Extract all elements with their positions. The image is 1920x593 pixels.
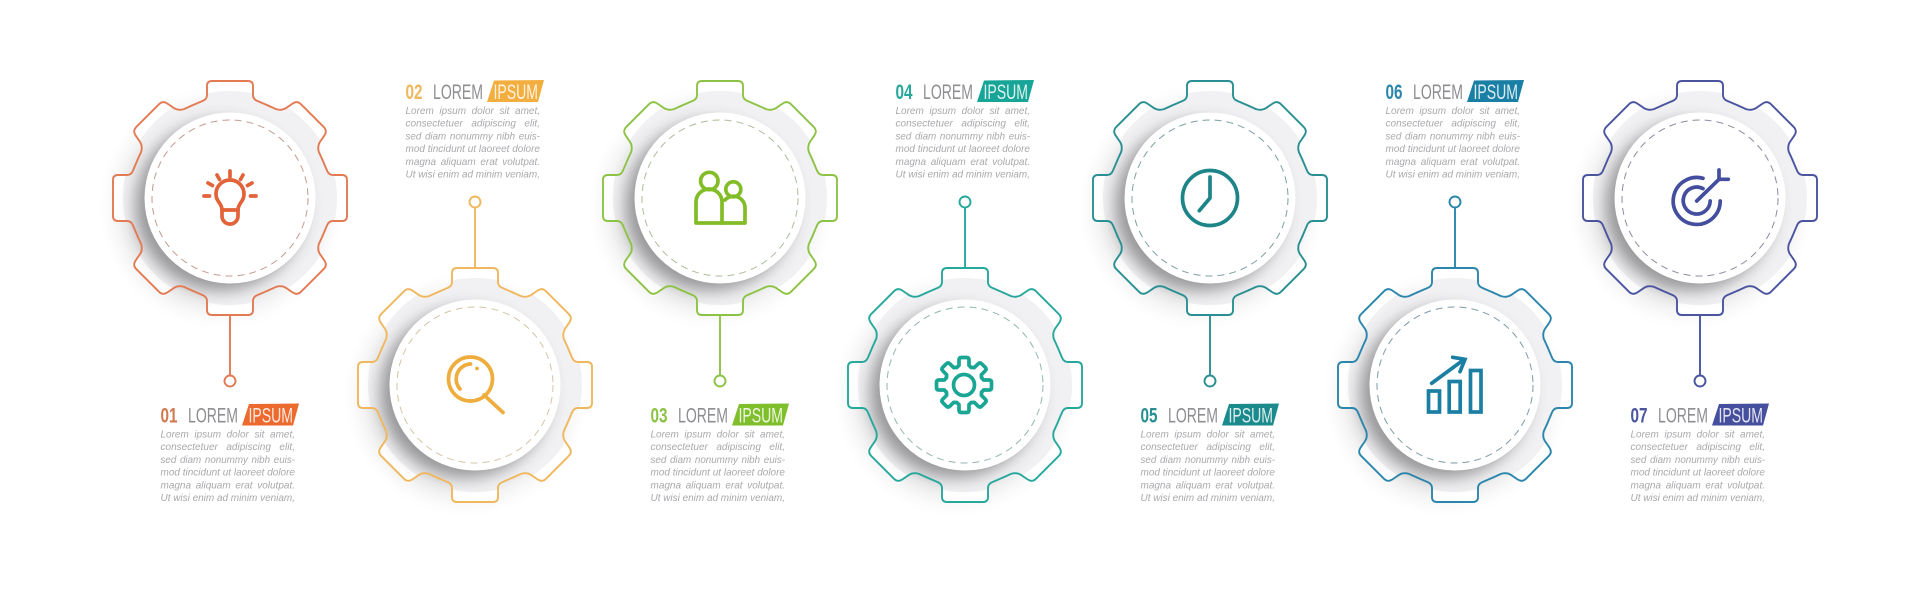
text block 03: Ut wisi enim ad minim veniam, [650,492,785,504]
text block 04: sed diam nonummy nibh euis- [896,130,1030,142]
text block 06 [1386,80,1524,180]
text block 02: IPSUM [494,81,538,104]
text block 07: sed diam nonummy nibh euis- [1630,454,1765,466]
connector: step 6 [1450,196,1460,268]
text block 06: 06 [1386,81,1402,104]
connector: step 4 [960,196,970,268]
text block 01: LOREM [188,404,238,428]
text block 01: consectetuer adipiscing elit, [160,441,295,453]
text block 04 [896,80,1034,180]
text block 06: Ut wisi enim ad minim veniam, [1386,168,1520,180]
connector: step 5 [1204,315,1216,386]
text block 01 [160,404,299,504]
text block 03: 03 [650,404,668,428]
text block 04: consectetuer adipiscing elit, [896,118,1030,130]
text block 04: IPSUM [984,81,1028,104]
step 7 gear [1583,81,1817,386]
text block 05: mod tincidunt ut laoreet dolore [1140,467,1275,479]
text block 03 [650,404,789,504]
text block 04: LOREM [923,81,973,104]
icon: magnifier [448,357,503,412]
step 5 gear [1093,81,1327,386]
icon: clock [1182,170,1238,226]
connector: step 3 [714,315,726,386]
text block 03: mod tincidunt ut laoreet dolore [650,467,785,479]
text block 07: consectetuer adipiscing elit, [1630,441,1765,453]
text block 01: mod tincidunt ut laoreet dolore [160,467,295,479]
step 6 gear [1338,196,1572,502]
text block 01: 01 [160,404,178,428]
text block 05: LOREM [1168,404,1218,428]
icon: bar chart with arrow [1428,357,1481,412]
text block 02: consectetuer adipiscing elit, [406,118,540,130]
text block 05 [1140,404,1279,504]
text block 05: 05 [1140,404,1158,428]
connector: step 7 [1694,315,1706,386]
text block 02: Ut wisi enim ad minim veniam, [406,168,540,180]
text block 02: magna aliquam erat volutpat. [406,156,540,168]
text block 07: 07 [1630,404,1648,428]
text block 05: sed diam nonummy nibh euis- [1140,454,1275,466]
text block 06: sed diam nonummy nibh euis- [1386,130,1520,142]
text block 03: IPSUM [738,404,783,428]
text block 06: LOREM [1413,81,1463,104]
text block 01: Lorem ipsum dolor sit amet, [160,428,295,440]
connector: step 1 [224,315,236,386]
step 1 gear [113,81,347,386]
text block 02: Lorem ipsum dolor sit amet, [406,105,540,117]
text block 06: magna aliquam erat volutpat. [1386,156,1520,168]
text block 04: Lorem ipsum dolor sit amet, [896,105,1030,117]
text block 06: mod tincidunt ut laoreet dolore [1386,143,1520,155]
connector: step 2 [470,196,480,268]
text block 01: magna aliquam erat volutpat. [160,479,295,491]
text block 06: IPSUM [1474,81,1518,104]
text block 01: IPSUM [248,404,293,428]
text block 02: sed diam nonummy nibh euis- [406,130,540,142]
text block 01: Ut wisi enim ad minim veniam, [160,492,295,504]
text block 04: 04 [896,81,913,104]
text block 03: LOREM [678,404,728,428]
text block 05: Ut wisi enim ad minim veniam, [1140,492,1275,504]
text block 04: mod tincidunt ut laoreet dolore [896,143,1030,155]
text block 05: IPSUM [1228,404,1273,428]
text block 04: magna aliquam erat volutpat. [896,156,1030,168]
text block 02 [406,80,544,180]
text block 07: LOREM [1658,404,1708,428]
icon: light bulb [204,171,256,224]
text block 06: consectetuer adipiscing elit, [1386,118,1520,130]
step 4 gear [848,196,1082,502]
text block 07: IPSUM [1718,404,1763,428]
text block 07: Lorem ipsum dolor sit amet, [1630,428,1765,440]
text block 07: Ut wisi enim ad minim veniam, [1630,492,1765,504]
text block 03: sed diam nonummy nibh euis- [650,454,785,466]
text block 05: consectetuer adipiscing elit, [1140,441,1275,453]
text block 02: 02 [406,81,422,104]
text block 03: magna aliquam erat volutpat. [650,479,785,491]
text block 03: consectetuer adipiscing elit, [650,441,785,453]
text block 05: magna aliquam erat volutpat. [1140,479,1275,491]
text block 01: sed diam nonummy nibh euis- [160,454,295,466]
text block 02: mod tincidunt ut laoreet dolore [406,143,540,155]
text block 07 [1630,404,1769,504]
text block 03: Lorem ipsum dolor sit amet, [650,428,785,440]
text block 05: Lorem ipsum dolor sit amet, [1140,428,1275,440]
text block 06: Lorem ipsum dolor sit amet, [1386,105,1520,117]
icon: people [696,172,745,223]
text block 07: magna aliquam erat volutpat. [1630,479,1765,491]
icon: target [1673,170,1728,224]
text block 04: Ut wisi enim ad minim veniam, [896,168,1030,180]
text block 07: mod tincidunt ut laoreet dolore [1630,467,1765,479]
text block 02: LOREM [433,81,483,104]
step 3 gear [603,81,837,386]
icon: cog [936,358,992,412]
step 2 gear [358,196,592,502]
